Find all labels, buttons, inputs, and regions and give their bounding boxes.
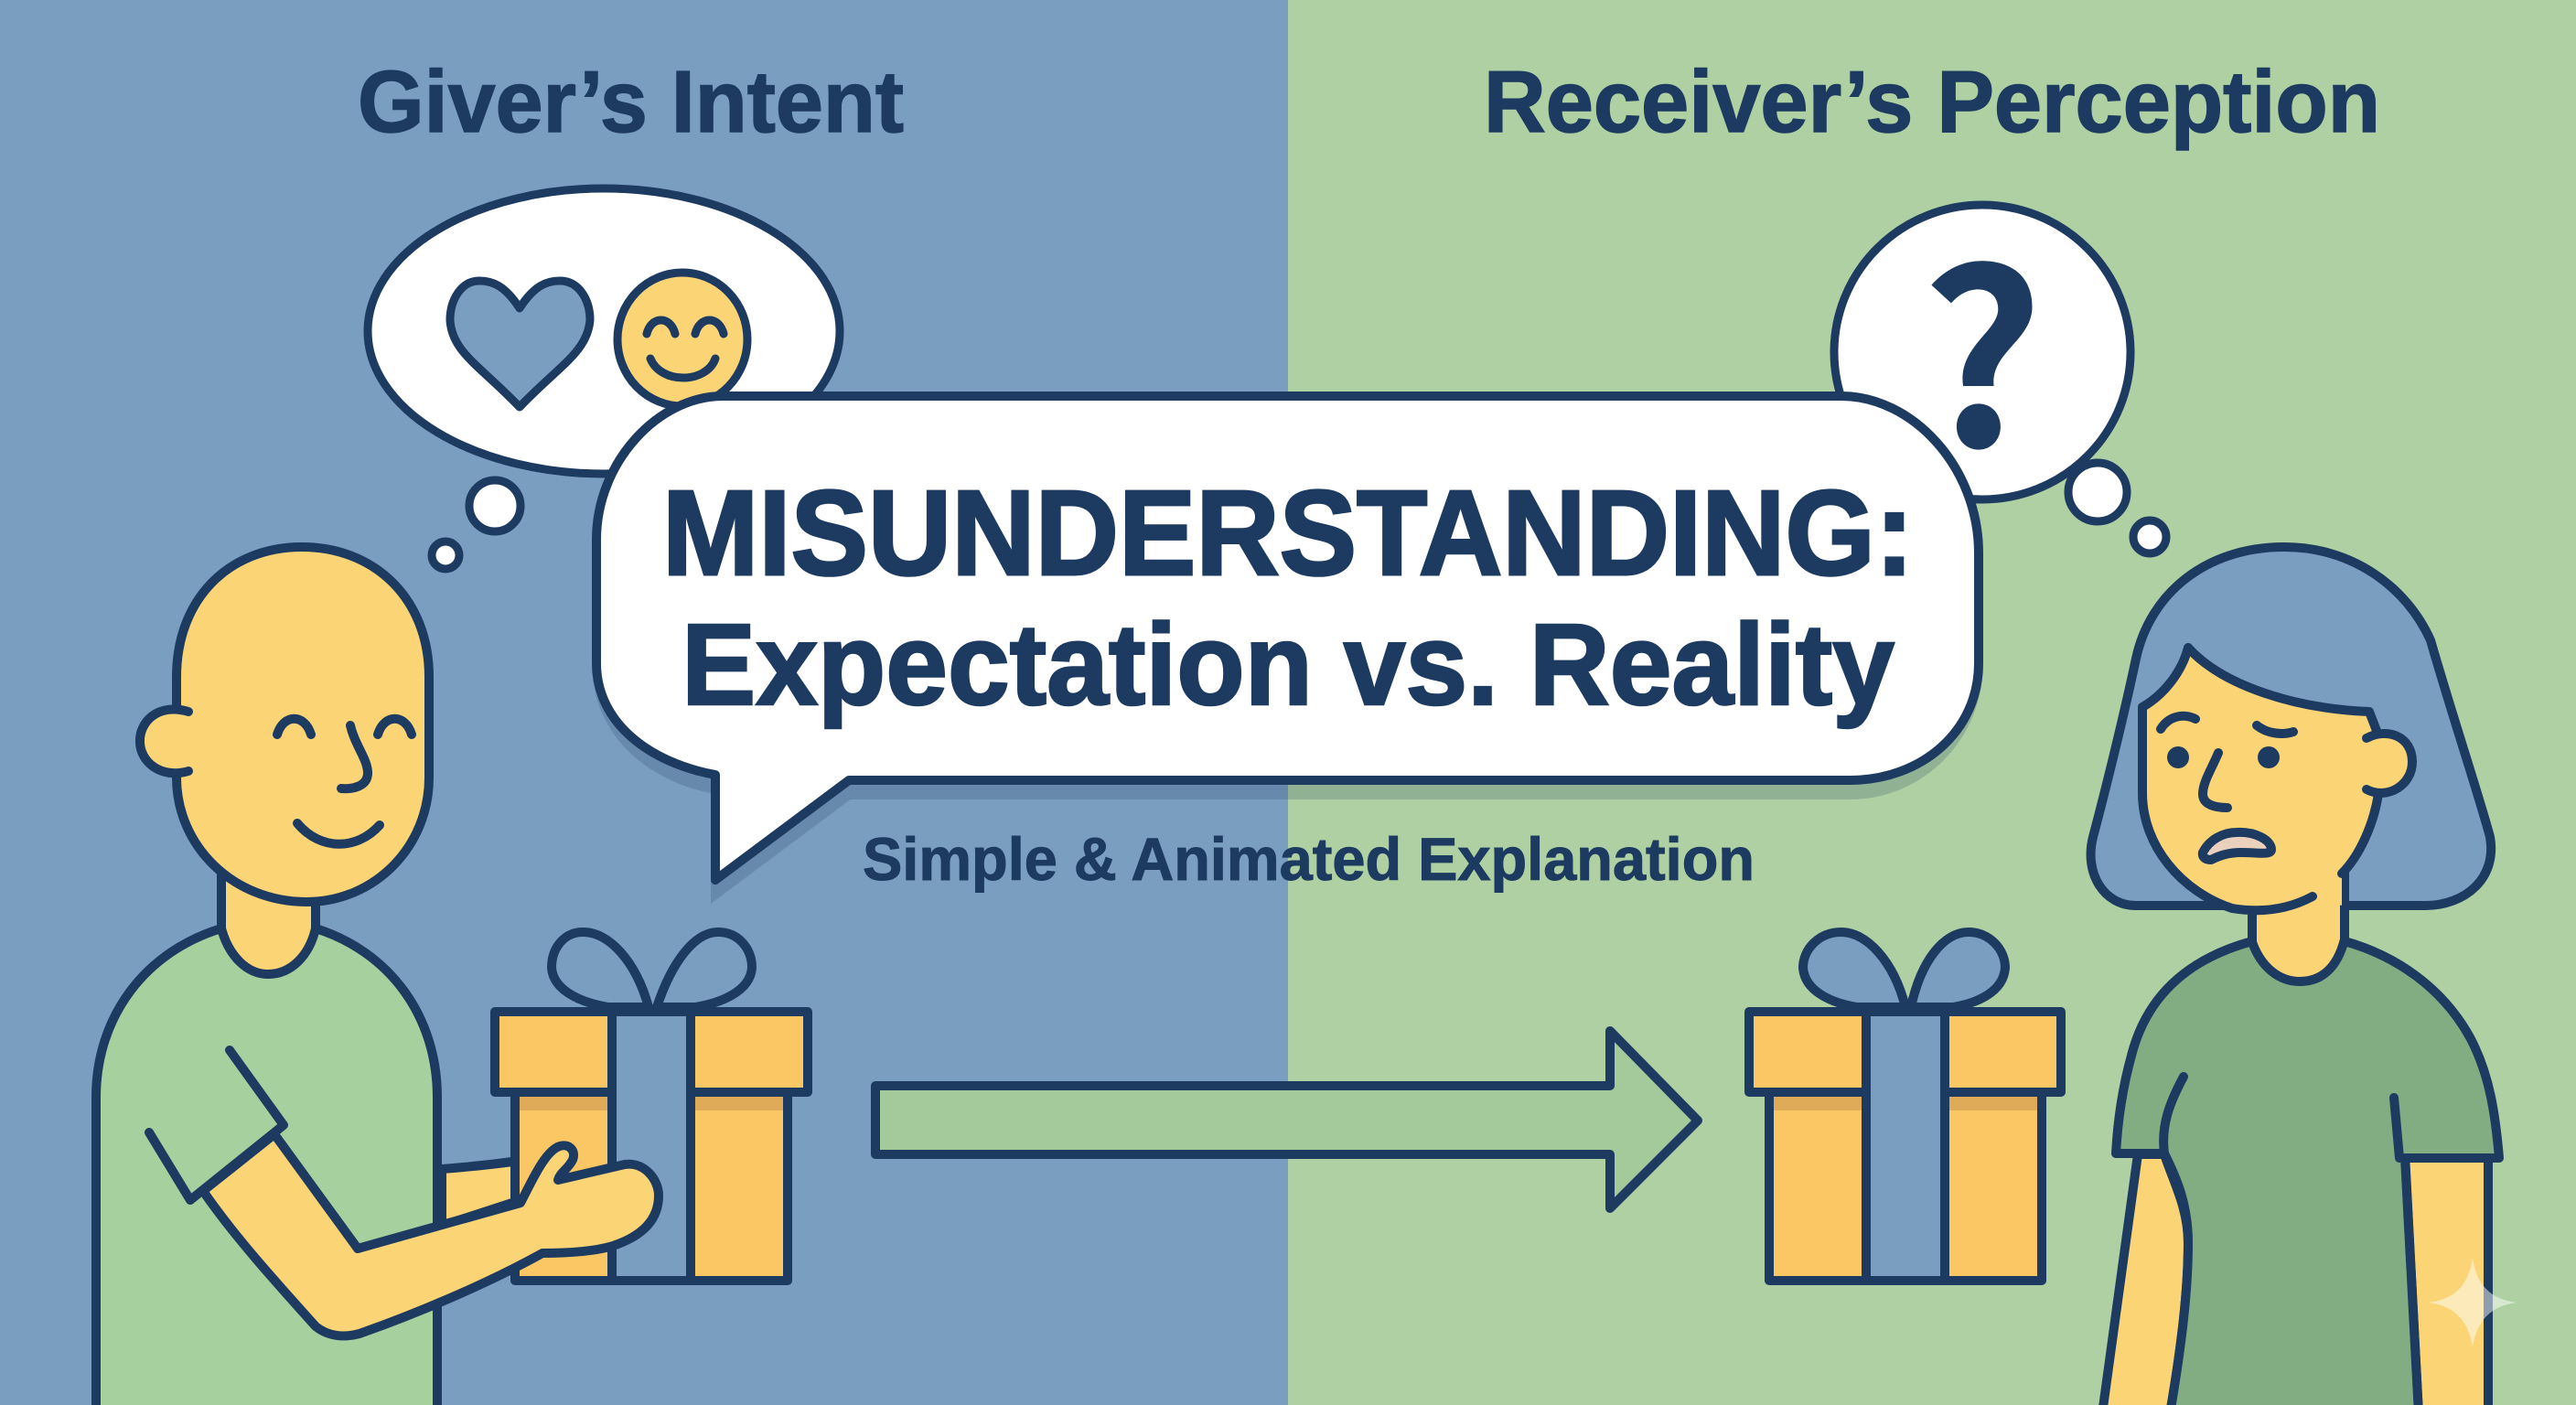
face outline	[2142, 648, 2378, 910]
gift received	[1749, 932, 2061, 1281]
shirt	[2116, 941, 2499, 1405]
sleeve lines	[2163, 1077, 2399, 1158]
face fill	[2142, 648, 2378, 910]
eyes	[277, 719, 412, 735]
gift box	[1769, 1092, 2042, 1281]
shirt	[96, 928, 437, 1405]
eyebrows	[2161, 716, 2293, 734]
gift lid	[1749, 1012, 2061, 1092]
gift box	[515, 1092, 788, 1281]
mouth	[297, 823, 380, 844]
eyes	[2167, 746, 2280, 768]
hair	[2091, 547, 2491, 906]
gift ribbon	[1866, 1012, 1945, 1281]
thought dot large	[469, 480, 521, 531]
main title line 2: Expectation vs. Reality	[682, 600, 1894, 729]
thought dot large	[2068, 463, 2127, 521]
gift ribbon	[612, 1012, 691, 1281]
main title line 1: MISUNDERSTANDING:	[662, 466, 1914, 600]
main callout bubble	[596, 396, 1979, 880]
icon: heart	[450, 281, 590, 407]
near arm and hand	[203, 1134, 659, 1335]
neck	[2252, 869, 2345, 981]
ear	[140, 710, 188, 773]
arm right	[2405, 1154, 2488, 1405]
receiver person	[2091, 547, 2517, 1405]
icon: question mark: ?	[1921, 169, 2044, 516]
arm left	[2102, 1154, 2188, 1405]
thought dot small	[432, 542, 459, 569]
ear	[2367, 734, 2412, 793]
gift held	[495, 932, 808, 1281]
main callout bubble shadow	[596, 411, 1979, 895]
icon: smiley	[617, 273, 747, 406]
giver person	[96, 547, 808, 1405]
panel: receiver background	[1288, 0, 2576, 1405]
gift shade	[1774, 1096, 2037, 1110]
heading: giver's intent: Giver’s Intent	[358, 53, 904, 151]
head	[177, 547, 429, 902]
panel: giver background	[0, 0, 1288, 1405]
gift shade	[520, 1096, 783, 1110]
neck	[221, 869, 316, 974]
thought dot small	[2133, 520, 2166, 553]
nose	[2203, 753, 2227, 808]
gift lid	[495, 1012, 808, 1092]
subtitle: Simple & Animated Explanation	[863, 825, 1755, 893]
sparkle watermark	[2429, 1259, 2517, 1346]
arrow	[875, 1031, 1698, 1208]
giver thought bubble	[368, 188, 840, 569]
far arm	[442, 1160, 526, 1226]
nose	[341, 725, 368, 788]
bow	[552, 932, 752, 1007]
heading: receiver's perception: Receiver’s Perception	[1484, 53, 2380, 151]
sleeve	[149, 1050, 284, 1200]
receiver thought bubble	[1834, 169, 2166, 553]
mouth	[2203, 832, 2271, 860]
bow	[1803, 932, 2005, 1007]
